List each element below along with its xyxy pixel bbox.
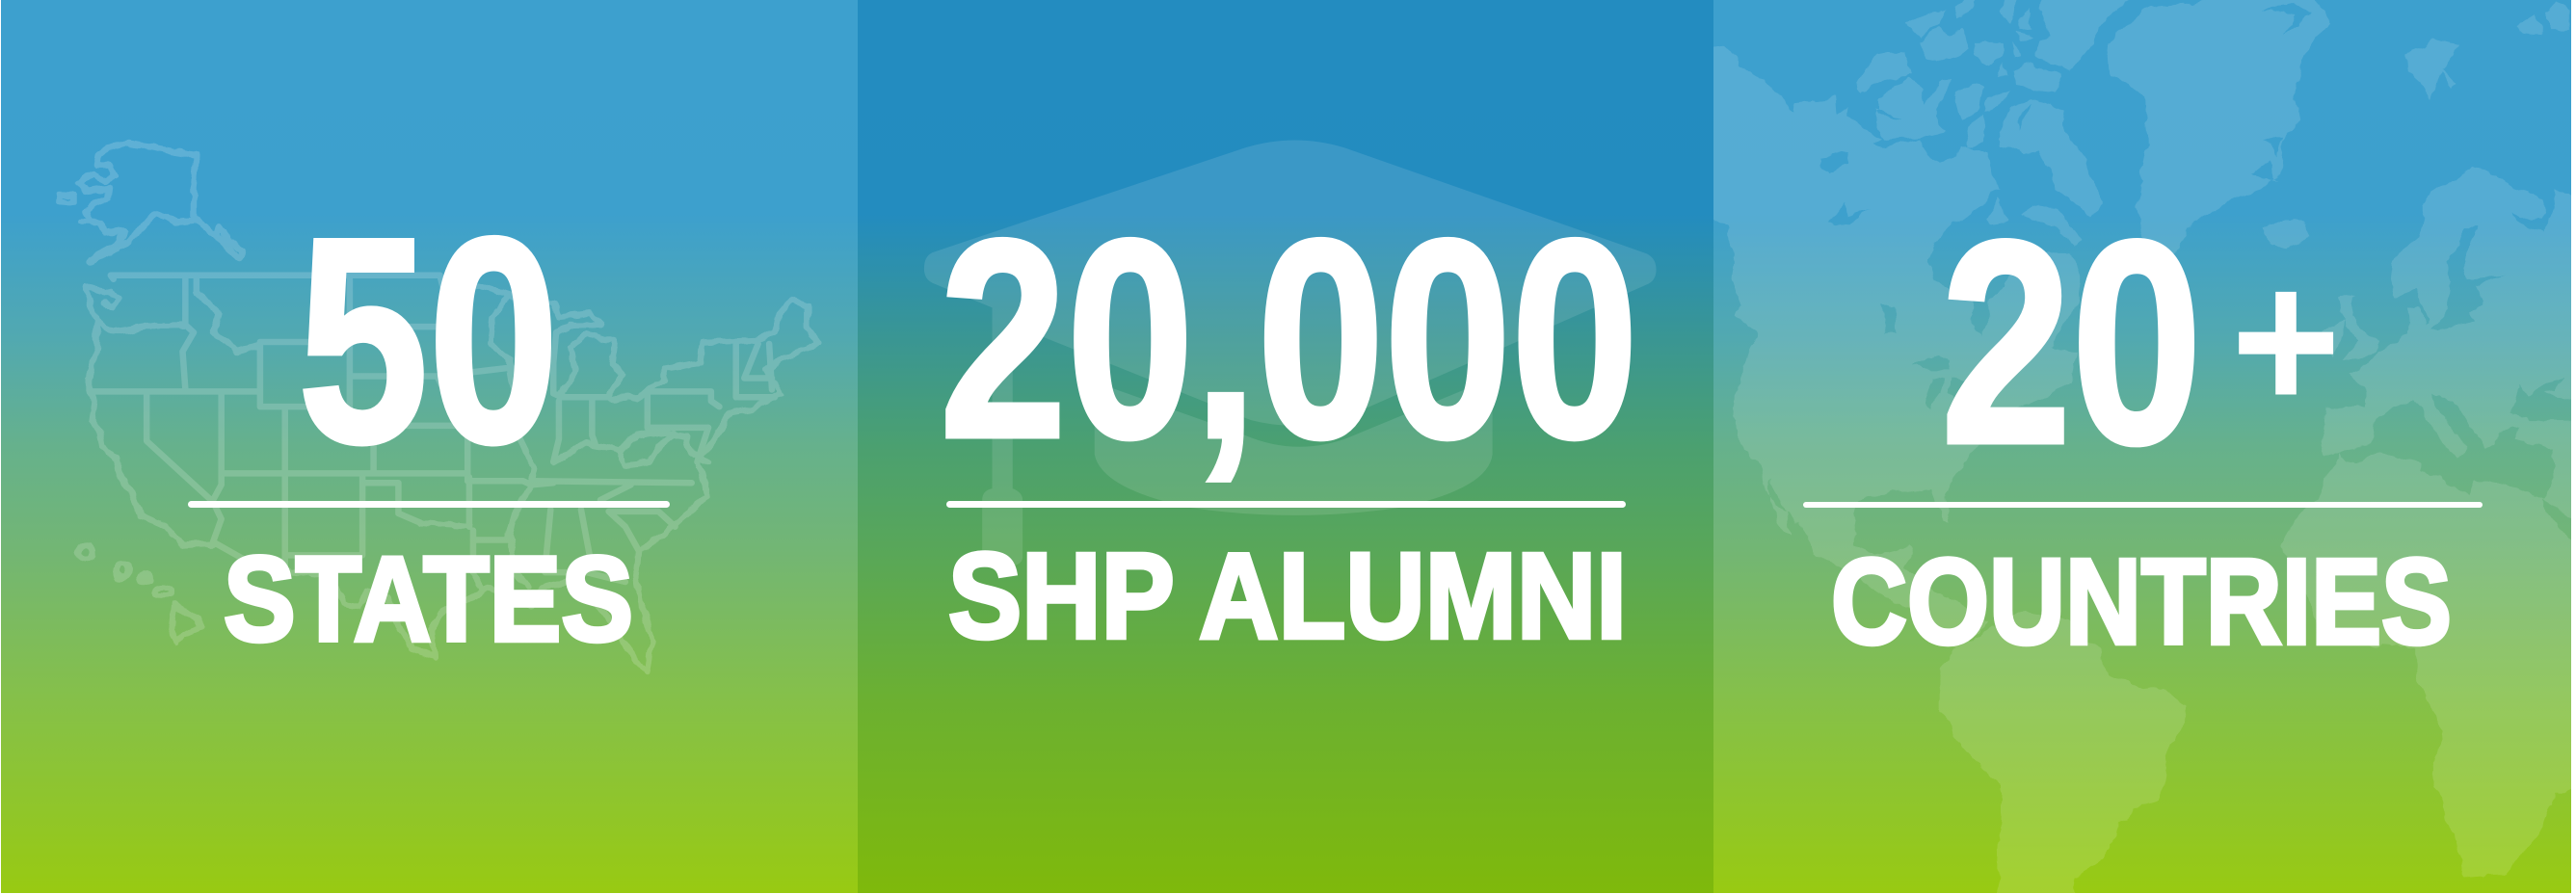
- panel: 20,000 SHP alumni: [858, 0, 1713, 893]
- panel background: [1713, 0, 2571, 893]
- divider line: [188, 501, 670, 508]
- number: 20,000: 20,000: [940, 182, 1638, 497]
- number: 50: 50: [298, 178, 559, 504]
- icon: world map: [1703, 0, 2576, 894]
- panel background: [1, 0, 858, 893]
- panel: 20+ countries: [1703, 0, 2576, 894]
- number: 20: 20: [1941, 180, 2202, 504]
- label: SHP ALUMNI: SHP ALUMNI: [948, 528, 1627, 664]
- divider line: [946, 501, 1626, 508]
- plus sign: +: [2231, 227, 2341, 454]
- panel background: [858, 0, 1713, 893]
- panel: 50 states: [1, 0, 858, 893]
- icon: graduation cap: [924, 140, 1657, 566]
- label: COUNTRIES: COUNTRIES: [1831, 534, 2452, 670]
- icon: United States map outline: [60, 143, 819, 671]
- label: STATES: STATES: [224, 533, 633, 667]
- divider line: [1803, 502, 2483, 508]
